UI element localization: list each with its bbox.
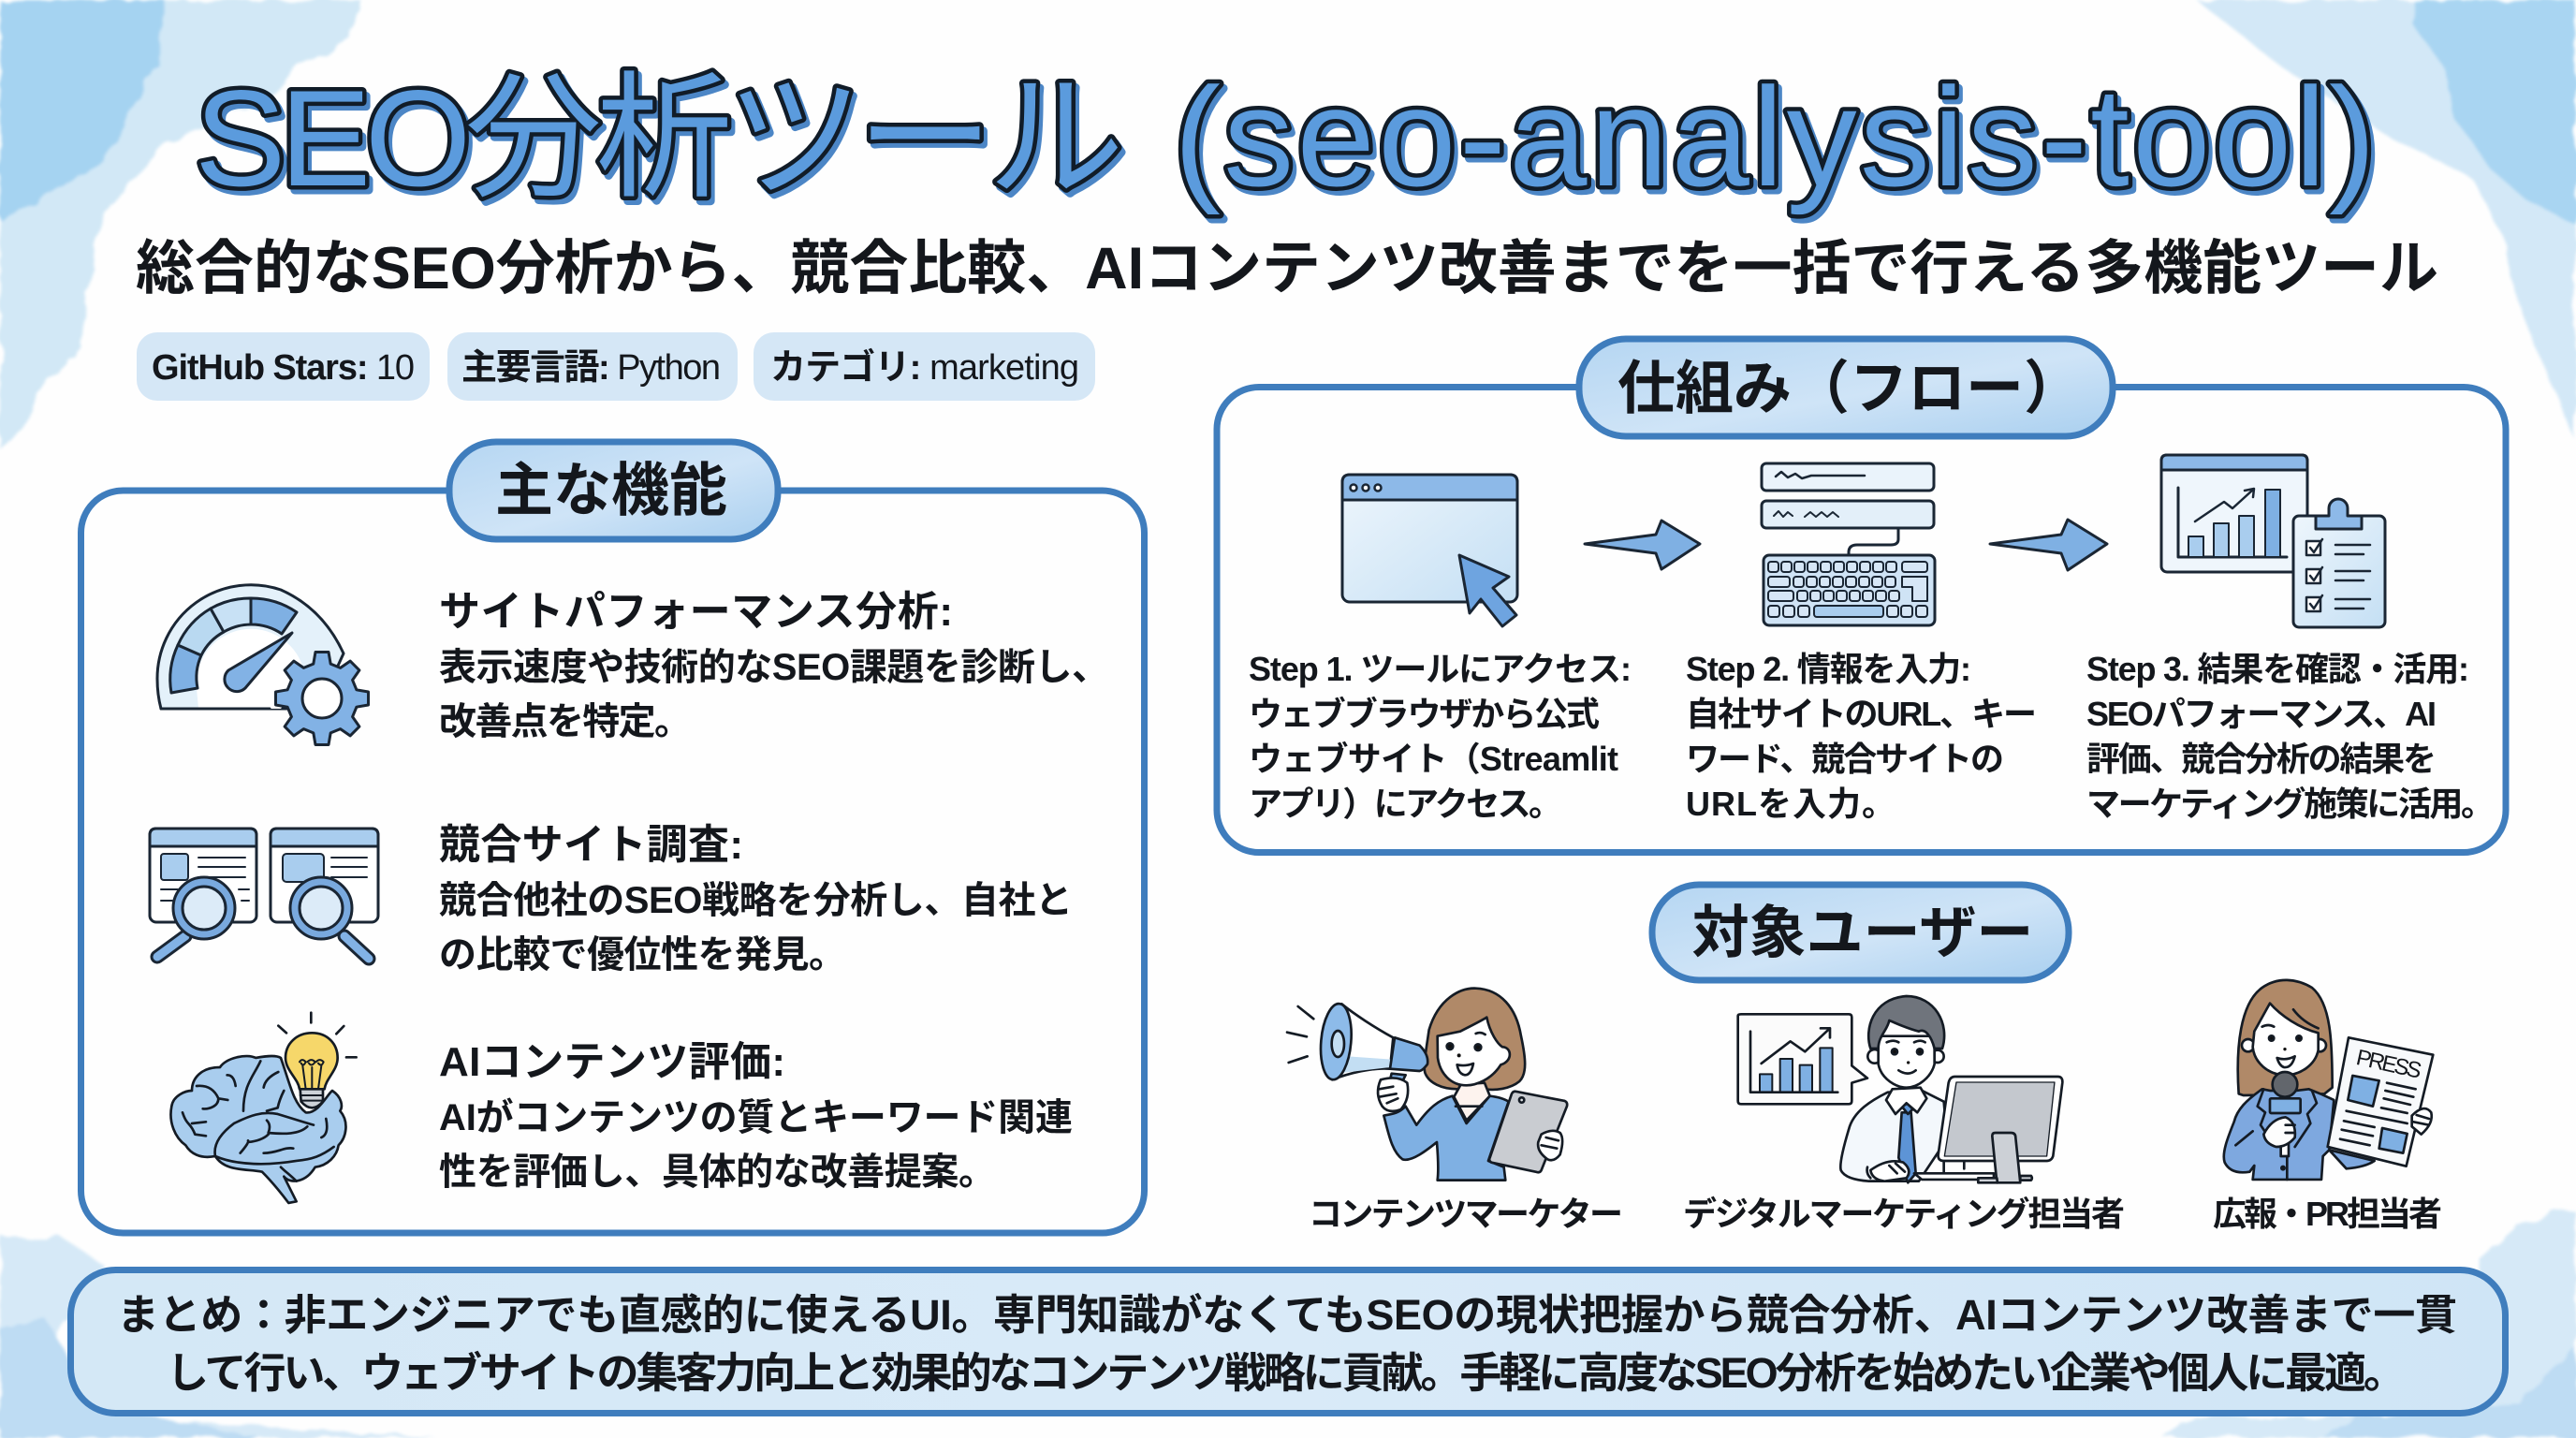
- text: step 2: 自社サイトのURL、キー: [1686, 695, 2037, 733]
- text: competitor research: 競合サイト調査:: [439, 822, 743, 868]
- text: step 1: [1249, 650, 1632, 823]
- text: competitor research: の比較で優位性を発見。: [439, 934, 846, 976]
- text: site performance: 改善点を特定。: [439, 701, 692, 742]
- label: content marketer: コンテンツマーケター: [1309, 1195, 1623, 1233]
- title: (seo-analysis-tool): [1178, 63, 2379, 220]
- text: step 3: 評価、競合分析の結果を: [2086, 740, 2437, 778]
- heading: how it works: [1579, 339, 2113, 436]
- icon: results chart and checklist: [2161, 455, 2385, 627]
- text: step 2: Step 2. 情報を入力:: [1686, 650, 1971, 688]
- heading: how it works: 仕組み（フロー）: [1617, 357, 2082, 421]
- icon: brain and light bulb: [170, 1013, 357, 1203]
- illustration: digital marketer: [1738, 996, 2062, 1182]
- badge: GitHub Stars: [137, 332, 430, 401]
- arrow: step 2 to 3: [1990, 520, 2107, 570]
- illustration: PR person: PRESS: [2354, 1045, 2424, 1084]
- text: step 3: Step 3. 結果を確認・活用:: [2086, 650, 2469, 688]
- illustration: content marketer: [1287, 989, 1567, 1181]
- text: step 2: URLを入力。: [1686, 785, 1895, 823]
- text: step 3: SEOパフォーマンス、AI: [2086, 695, 2437, 733]
- heading: target users: [1652, 885, 2069, 980]
- text: AI content evaluation: AIがコンテンツの質とキーワード関連: [439, 1097, 1073, 1138]
- text: step 2: [1686, 650, 2037, 823]
- panel: main features: [80, 442, 1144, 1233]
- badge: language: 主要言語: Python: [461, 348, 721, 388]
- text: step 1: アプリ）にアクセス。: [1249, 785, 1562, 823]
- text: step 1: ウェブブラウザから公式: [1249, 695, 1600, 733]
- heading: target users: 対象ユーザー: [1692, 901, 2033, 964]
- text: site performance: サイトパフォーマンス分析:: [439, 589, 953, 635]
- subtitle: 総合的なSEO分析から、競合比較、AIコンテンツ改善までを一括で行える多機能ツール: [136, 236, 2438, 301]
- badge: language: [447, 332, 738, 401]
- text: step 3: マーケティング施策に活用。: [2086, 785, 2495, 823]
- title: [195, 58, 2379, 220]
- label: digital marketer: デジタルマーケティング担当者: [1683, 1195, 2125, 1233]
- badge: GitHub Stars: GitHub Stars: 10: [152, 348, 415, 388]
- text: AI content evaluation: 性を評価し、具体的な改善提案。: [439, 1152, 996, 1193]
- text: AI content evaluation: AIコンテンツ評価:: [439, 1039, 785, 1085]
- label: PR person: 広報・PR担当者: [2213, 1195, 2442, 1233]
- text: competitor research: 競合他社のSEO戦略を分析し、自社と: [439, 880, 1073, 921]
- illustration: PR person: [2224, 980, 2433, 1180]
- text: step 3: [2086, 650, 2495, 823]
- text: site performance: [439, 589, 1109, 742]
- icon: browser and cursor: [1342, 475, 1517, 626]
- icon: input form and keyboard: [1762, 463, 1935, 625]
- panel: how it works: [1217, 339, 2506, 852]
- icon: gauge and gear: [157, 585, 369, 745]
- arrow: step 1 to 2: [1585, 521, 1700, 569]
- summary banner: して行い、ウェブサイトの集客力向上と効果的なコンテンツ戦略に貢献。手軽に高度なSEO分析を始めたい企業や個人に最適。: [167, 1349, 2406, 1397]
- badge: category: [754, 332, 1095, 401]
- text: step 1: ウェブサイト（Streamlit: [1249, 740, 1618, 778]
- text: site performance: 表示速度や技術的なSEO課題を診断し、: [439, 647, 1109, 688]
- text: step 1: Step 1. ツールにアクセス:: [1249, 650, 1632, 688]
- title: (seo-analysis-tool): [1174, 58, 2376, 215]
- title: SEO分析ツール: [198, 66, 1128, 219]
- icon: competitor browsers with magnifiers: [150, 829, 378, 959]
- text: AI content evaluation: [439, 1039, 1073, 1193]
- heading: main features: 主な機能: [495, 459, 727, 523]
- title: SEO分析ツール: [195, 62, 1124, 214]
- heading: main features: [449, 442, 778, 539]
- summary banner: まとめ：非エンジニアでも直感的に使えるUI。専門知識がなくてもSEOの現状把握から競合分析、AIコンテンツ改善まで一貫: [117, 1291, 2457, 1339]
- text: competitor research: [439, 822, 1073, 976]
- text: step 2: ワード、競合サイトの: [1686, 740, 2004, 778]
- summary banner: [71, 1269, 2505, 1414]
- badge: category: カテゴリ: marketing: [770, 348, 1079, 388]
- badges: [137, 332, 1095, 401]
